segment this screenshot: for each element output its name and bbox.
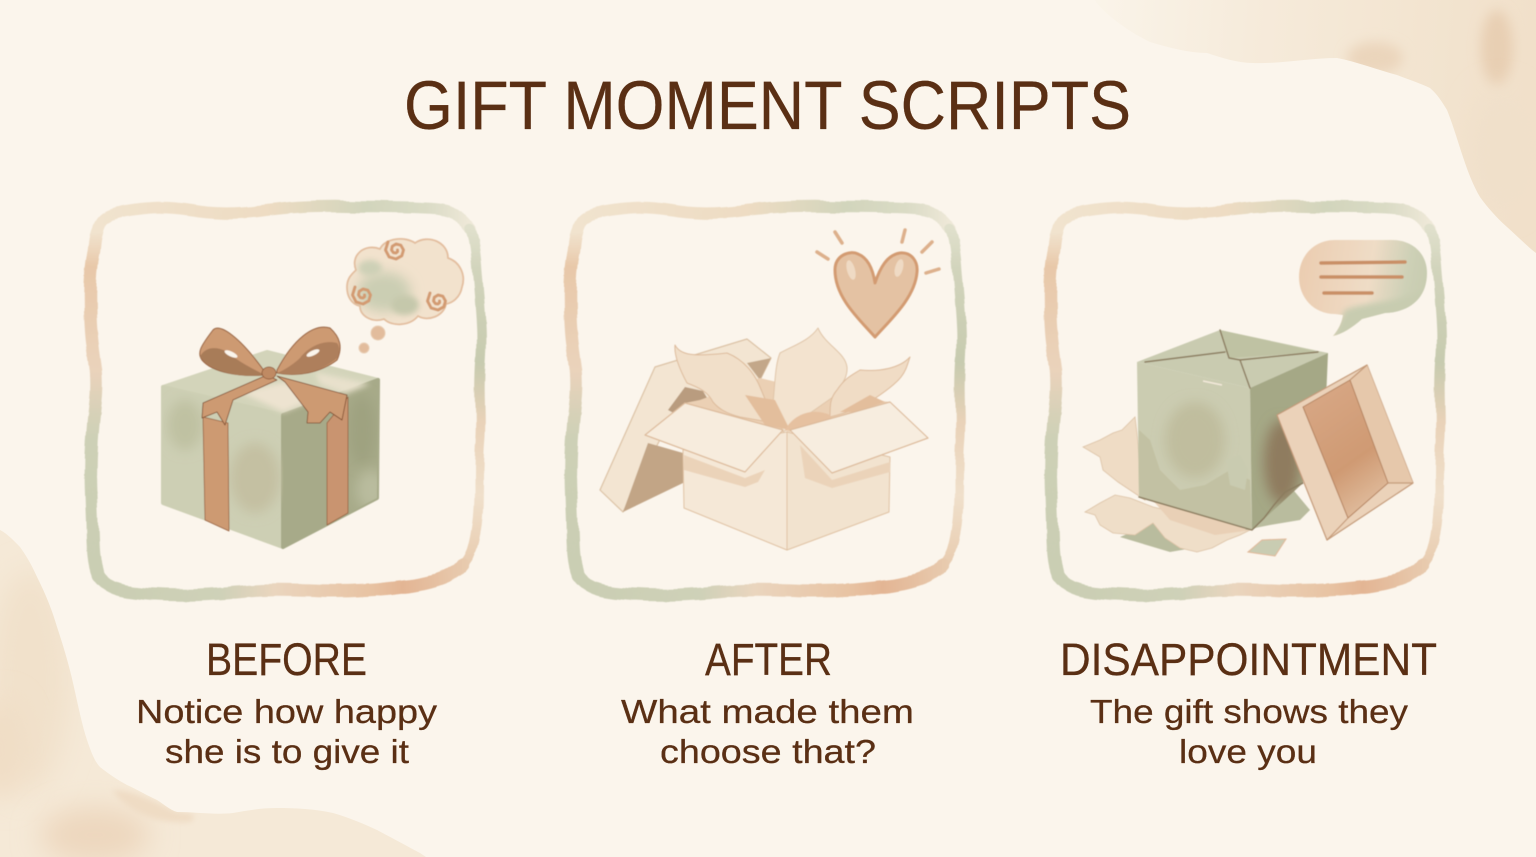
caption: before [136, 634, 438, 770]
watercolor wash: top right [1149, 0, 1536, 253]
icon: fallen lid [1277, 365, 1413, 540]
frame: before [90, 206, 482, 595]
frame: disappointment [1050, 206, 1442, 595]
box interior [685, 378, 890, 432]
icon: speech bubble [1299, 240, 1430, 340]
panel: before [90, 206, 482, 595]
caption: after [621, 634, 914, 770]
bow [200, 328, 265, 375]
box [683, 432, 787, 550]
heading: disappointment: DISAPPOINTMENT [1060, 634, 1437, 685]
panel: disappointment [1050, 206, 1442, 595]
text: after line 1: What made them [621, 693, 914, 730]
text: after line 2: choose that? [660, 733, 876, 770]
text: before line 1: Notice how happy [136, 693, 438, 730]
watercolor wash: bottom left [0, 520, 430, 857]
panel: after [570, 206, 962, 595]
tissue [675, 345, 775, 423]
heading: after: AFTER [705, 634, 832, 685]
ribbon bands [203, 417, 229, 531]
icon: open box with tissue [600, 328, 928, 550]
heading: before: BEFORE [206, 634, 367, 685]
text: disappointment line 2: love you [1179, 733, 1317, 770]
icon: thought cloud [347, 239, 463, 353]
lid [600, 339, 771, 512]
text: disappointment line 1: The gift shows they [1090, 693, 1409, 730]
title: GIFT MOMENT SCRIPTS [404, 67, 1131, 144]
text: before line 2: she is to give it [165, 733, 409, 770]
icon: torn wrapping paper [1083, 417, 1310, 556]
icon: wrapped gift [163, 327, 388, 547]
icon: damaged box [1135, 330, 1328, 535]
caption: disappointment [1060, 634, 1437, 770]
icon: glowing heart [817, 230, 939, 337]
frame: after [570, 206, 962, 595]
